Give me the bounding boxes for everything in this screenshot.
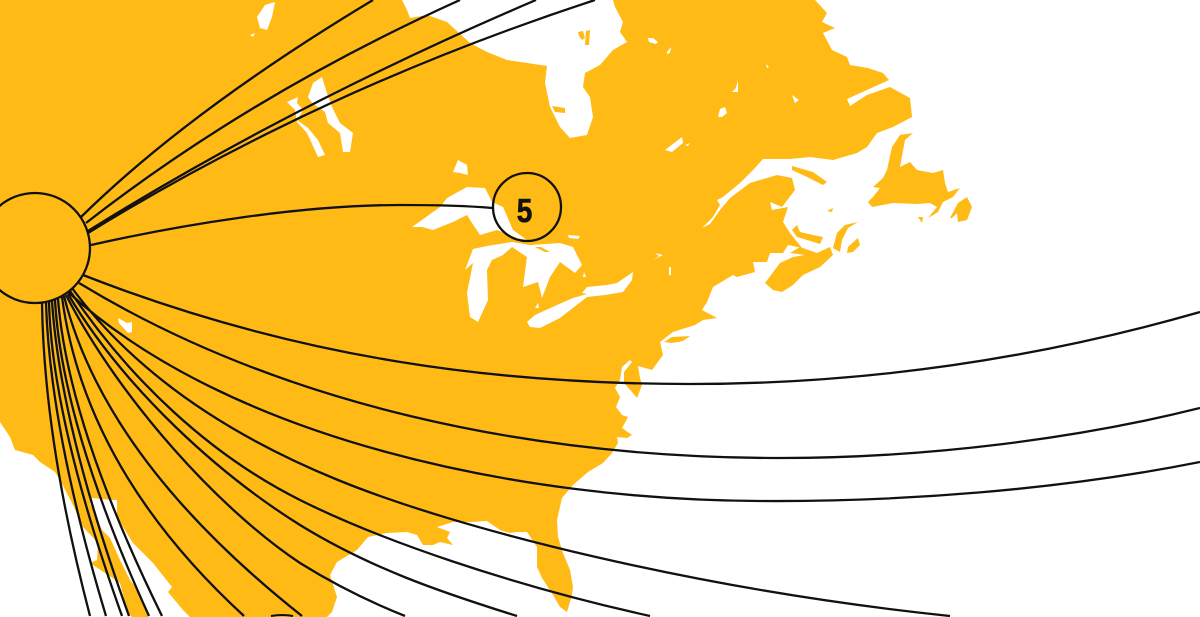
land: small island xyxy=(847,238,860,253)
water: Lake Manitoba xyxy=(287,97,325,157)
water: northern islet xyxy=(250,33,255,37)
route: south 2 xyxy=(62,297,244,616)
land: Avalon xyxy=(950,197,972,222)
water: Lake Nipissing xyxy=(568,235,580,239)
route: south 4 xyxy=(55,300,149,616)
water: small lake xyxy=(583,272,586,277)
water: Lake St Clair xyxy=(535,303,539,308)
hub circle xyxy=(0,193,90,303)
route: south 7 xyxy=(46,303,106,616)
route: to stop 5 xyxy=(91,205,492,245)
route: north 4 xyxy=(88,0,595,233)
land: Long Island xyxy=(664,336,690,343)
land: Hudson Bay islands xyxy=(535,30,590,252)
map: water bodies xyxy=(118,0,799,333)
water: Great Salt Lake xyxy=(118,318,132,333)
route: southeast 2 xyxy=(70,291,650,616)
land: Newfoundland islet xyxy=(918,217,923,223)
land: Cape Breton xyxy=(833,222,858,252)
water: Lakes Erie and Ontario xyxy=(527,272,633,328)
route: south 5 xyxy=(52,301,129,616)
route: southeast 4 xyxy=(66,295,405,616)
route: south 8 xyxy=(42,303,90,616)
stop marker cropped at bottom xyxy=(271,615,293,616)
route: southeast 3 xyxy=(68,294,517,616)
land: islet xyxy=(827,208,833,212)
route: east 2 xyxy=(79,283,1200,458)
water: Lake Nipigon xyxy=(453,160,468,175)
route: northwest 1 xyxy=(81,0,373,217)
land: Newfoundland xyxy=(868,133,960,218)
route: east 1 xyxy=(83,275,1200,384)
route: east 3 xyxy=(68,292,1200,501)
land: Prince Edward Island xyxy=(792,225,823,244)
water: Quebec lakes xyxy=(648,38,799,275)
route: north 2 xyxy=(86,0,460,223)
land: Nova Scotia xyxy=(765,247,833,292)
label: number 5: 5 xyxy=(517,193,532,230)
water: Lakes Michigan and Huron xyxy=(465,242,582,322)
route: south 6 xyxy=(49,302,122,616)
water: Hudson Bay xyxy=(402,0,627,138)
route: south 1 xyxy=(64,296,302,616)
land: mainland xyxy=(0,0,912,617)
route: north 3 xyxy=(88,0,536,231)
water: Lake Superior xyxy=(412,187,527,240)
route: south 3 xyxy=(58,299,162,616)
land: Anticosti xyxy=(792,166,827,185)
stop marker 5 xyxy=(493,173,561,241)
water: Lake Winnipeg xyxy=(308,77,353,152)
water: northern islands xyxy=(257,2,275,30)
route: southeast 1 xyxy=(72,288,950,616)
